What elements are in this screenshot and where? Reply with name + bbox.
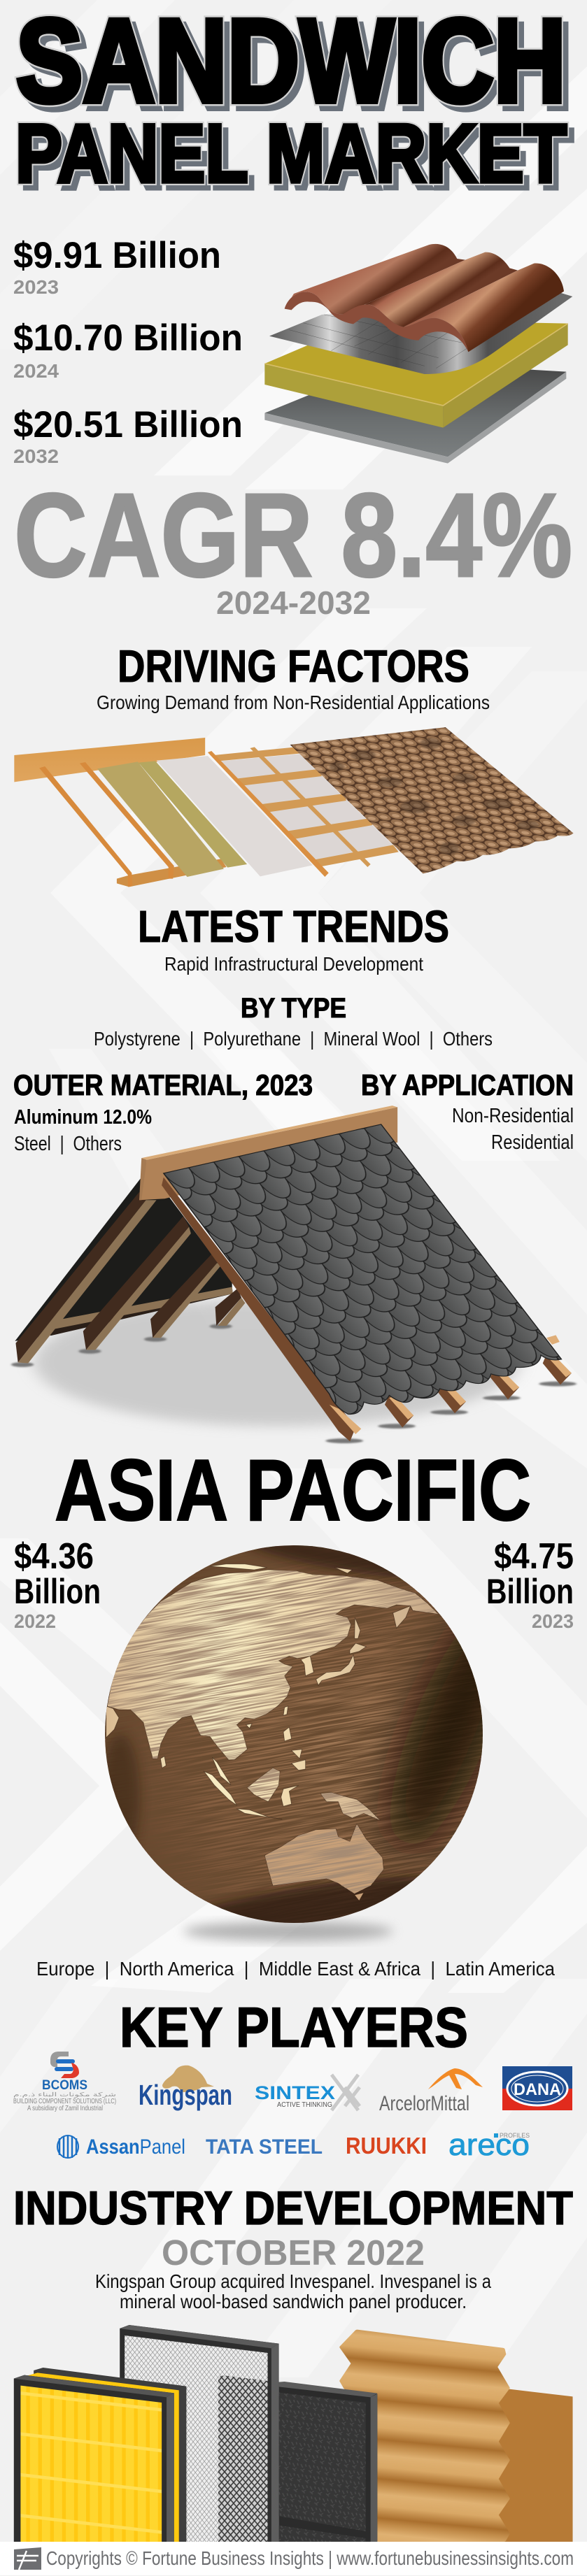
logo: AssanPanel: AssanPanel bbox=[86, 2135, 185, 2159]
type segments: Polystyrene | Polyurethane | Mineral Wool | Others bbox=[94, 1028, 493, 1050]
mineral wool core bbox=[264, 320, 568, 428]
logos bbox=[13, 2052, 572, 2162]
mesh panel bbox=[120, 2325, 279, 2542]
value 2032: $20.51 Billion bbox=[13, 404, 243, 445]
heading: by type: BY TYPE bbox=[241, 993, 346, 1024]
slate shingles bbox=[164, 1124, 561, 1414]
CAGR period: 2024-2032 bbox=[216, 585, 371, 621]
development date: OCTOBER 2022 bbox=[162, 2233, 425, 2273]
regions list: Europe | North America | Middle East & Africa | Latin America bbox=[36, 1958, 555, 1980]
line 1: Kingspan Group acquired Invespanel. Invespanel is a bbox=[95, 2270, 491, 2292]
continents bbox=[106, 1564, 439, 1901]
back roof underside and rafters bbox=[15, 1179, 245, 1364]
globe sphere bbox=[105, 1545, 483, 1923]
logo: Dana: DANA bbox=[514, 2080, 561, 2099]
market size figures bbox=[13, 235, 243, 467]
value 2024: $10.70 Billion bbox=[13, 317, 243, 359]
year: 2022 bbox=[14, 1610, 56, 1632]
battens bbox=[208, 747, 399, 877]
second yellow panel edge bbox=[27, 2368, 186, 2542]
corrugated sheet front bbox=[342, 2331, 507, 2540]
illustration: exploded roof layers bbox=[14, 727, 574, 887]
logo: Areco: PROFILES bbox=[500, 2132, 530, 2139]
rafter tails bbox=[162, 1178, 572, 1441]
driving factor text: Growing Demand from Non-Residential Applications bbox=[97, 692, 490, 713]
development text bbox=[95, 2270, 491, 2312]
logo: Kingspan: Kingspan bbox=[139, 2079, 232, 2111]
value 2023 region bbox=[486, 1536, 574, 1632]
year 2032: 2032 bbox=[13, 445, 59, 467]
outer material others: Steel | Others bbox=[14, 1133, 122, 1155]
line 2: mineral wool-based sandwich panel producer. bbox=[120, 2291, 467, 2312]
year 2023: 2023 bbox=[13, 276, 59, 298]
roof shingles bbox=[290, 727, 574, 873]
outer material share: Aluminum 12.0% bbox=[14, 1106, 152, 1129]
roof tile bbox=[285, 244, 564, 352]
heading: latest trends: LATEST TRENDS bbox=[138, 901, 449, 952]
logo: BCOMS: شركة مكونات البناء ذ.م.م bbox=[13, 2091, 117, 2098]
footer bbox=[0, 2542, 587, 2575]
unit: Billion bbox=[14, 1572, 101, 1611]
value 2022 bbox=[14, 1536, 101, 1632]
underlay sheet bbox=[157, 754, 399, 876]
logo: ArcelorMittal bbox=[379, 2068, 483, 2115]
globe shadow bbox=[183, 1922, 393, 1941]
value 2023: $9.91 Billion bbox=[13, 235, 221, 276]
foil layer bbox=[269, 292, 572, 374]
bottom metal sheet bbox=[264, 362, 566, 464]
logo: ArcelorMittal: ArcelorMittal bbox=[379, 2092, 469, 2115]
illustration: sandwich panel layers bbox=[264, 244, 572, 464]
logo: Ruukki: RUUKKI bbox=[346, 2133, 427, 2159]
heading: key players: KEY PLAYERS bbox=[120, 1996, 468, 2059]
logo: Sintex bbox=[255, 2075, 360, 2110]
ridge beam and rafters bbox=[14, 738, 227, 887]
illustration: panel cross-section materials bbox=[14, 2325, 573, 2542]
logo: Dana bbox=[502, 2066, 572, 2110]
amount: $4.75 bbox=[494, 1536, 574, 1577]
title bbox=[15, 0, 572, 206]
icon: Fortune Business Insights logo bbox=[14, 2547, 41, 2570]
insulation boards bbox=[97, 761, 247, 877]
logo: Sintex: ACTIVE THINKING bbox=[277, 2101, 332, 2109]
logo: BCOMS: BCOMS bbox=[42, 2078, 87, 2093]
logo: Sintex: SINTEX bbox=[255, 2082, 335, 2103]
logo: BCOMS: BUILDING COMPONENT SOLUTIONS (LLC) bbox=[13, 2098, 116, 2105]
latest trends text: Rapid Infrastructural Development bbox=[164, 953, 423, 975]
ridge beam bbox=[139, 1105, 397, 1200]
icon: wooden globe bbox=[105, 1545, 483, 1947]
wood grain bbox=[105, 1545, 483, 1923]
year: 2023 bbox=[532, 1610, 574, 1632]
ground shadow bbox=[11, 1298, 577, 1443]
land grain bbox=[108, 1570, 438, 1894]
heading: outer material: OUTER MATERIAL, 2023 bbox=[13, 1068, 313, 1101]
yellow honeycomb panel bbox=[14, 2375, 174, 2542]
year 2024: 2024 bbox=[13, 360, 59, 382]
logo: BCOMS bbox=[13, 2052, 117, 2112]
black felt panel bbox=[279, 2382, 377, 2542]
heading: driving factors: DRIVING FACTORS bbox=[118, 641, 469, 692]
logo: BCOMS: A subsidiary of Zamil Industrial bbox=[27, 2105, 103, 2112]
amount: $4.36 bbox=[14, 1536, 94, 1577]
illustration: slate roof bbox=[11, 1105, 577, 1443]
logo: Kingspan bbox=[139, 2066, 232, 2111]
logo: Areco: areco bbox=[448, 2128, 530, 2162]
corrugated sheet back bbox=[494, 2389, 573, 2542]
logo: Tata Steel: TATA STEEL bbox=[206, 2135, 323, 2159]
